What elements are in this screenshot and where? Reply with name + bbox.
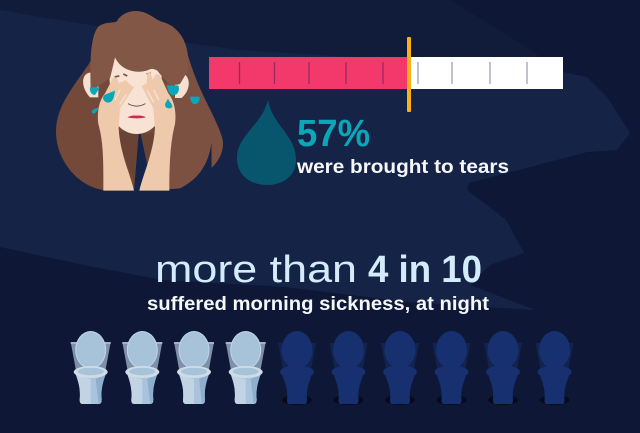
hair top xyxy=(90,11,188,92)
woman crying xyxy=(56,11,223,191)
toilet 3 xyxy=(174,331,214,404)
hair back xyxy=(56,57,223,190)
stat: 57%: 57% xyxy=(297,113,370,155)
bar marker xyxy=(407,37,411,112)
face xyxy=(108,57,162,134)
toilet 8 xyxy=(432,331,470,405)
bar filled portion xyxy=(209,57,409,89)
toilet 5 xyxy=(278,331,316,405)
arms and hands xyxy=(98,77,134,191)
tears xyxy=(90,85,200,114)
subheading: suffered morning sickness, at night xyxy=(147,294,490,315)
mouth and nose xyxy=(127,116,146,118)
bar empty portion xyxy=(409,57,563,89)
finger gaps xyxy=(115,90,159,104)
toilet 10 xyxy=(536,331,574,405)
background upper tone xyxy=(0,0,563,72)
caption: were brought to tears: were brought to tears xyxy=(296,157,509,178)
toilet 9 xyxy=(484,331,522,405)
heading: more than xyxy=(155,249,357,291)
bar ticks xyxy=(240,62,383,84)
toilet 6 xyxy=(330,331,368,405)
toilet 4 xyxy=(226,331,266,404)
progress bar xyxy=(209,37,563,112)
background brush band xyxy=(0,10,630,310)
toilet 1 xyxy=(71,331,111,404)
toilet 7 xyxy=(381,331,419,405)
eyes xyxy=(115,73,154,85)
inner hair shadow xyxy=(119,132,155,182)
icon: water drop xyxy=(237,100,296,185)
heading: 4 in 10 xyxy=(368,249,482,291)
pictogram: toilets xyxy=(71,331,573,405)
gap between arms xyxy=(134,134,147,191)
ears xyxy=(83,73,189,98)
hair right side xyxy=(167,57,223,189)
toilet 2 xyxy=(122,331,162,404)
